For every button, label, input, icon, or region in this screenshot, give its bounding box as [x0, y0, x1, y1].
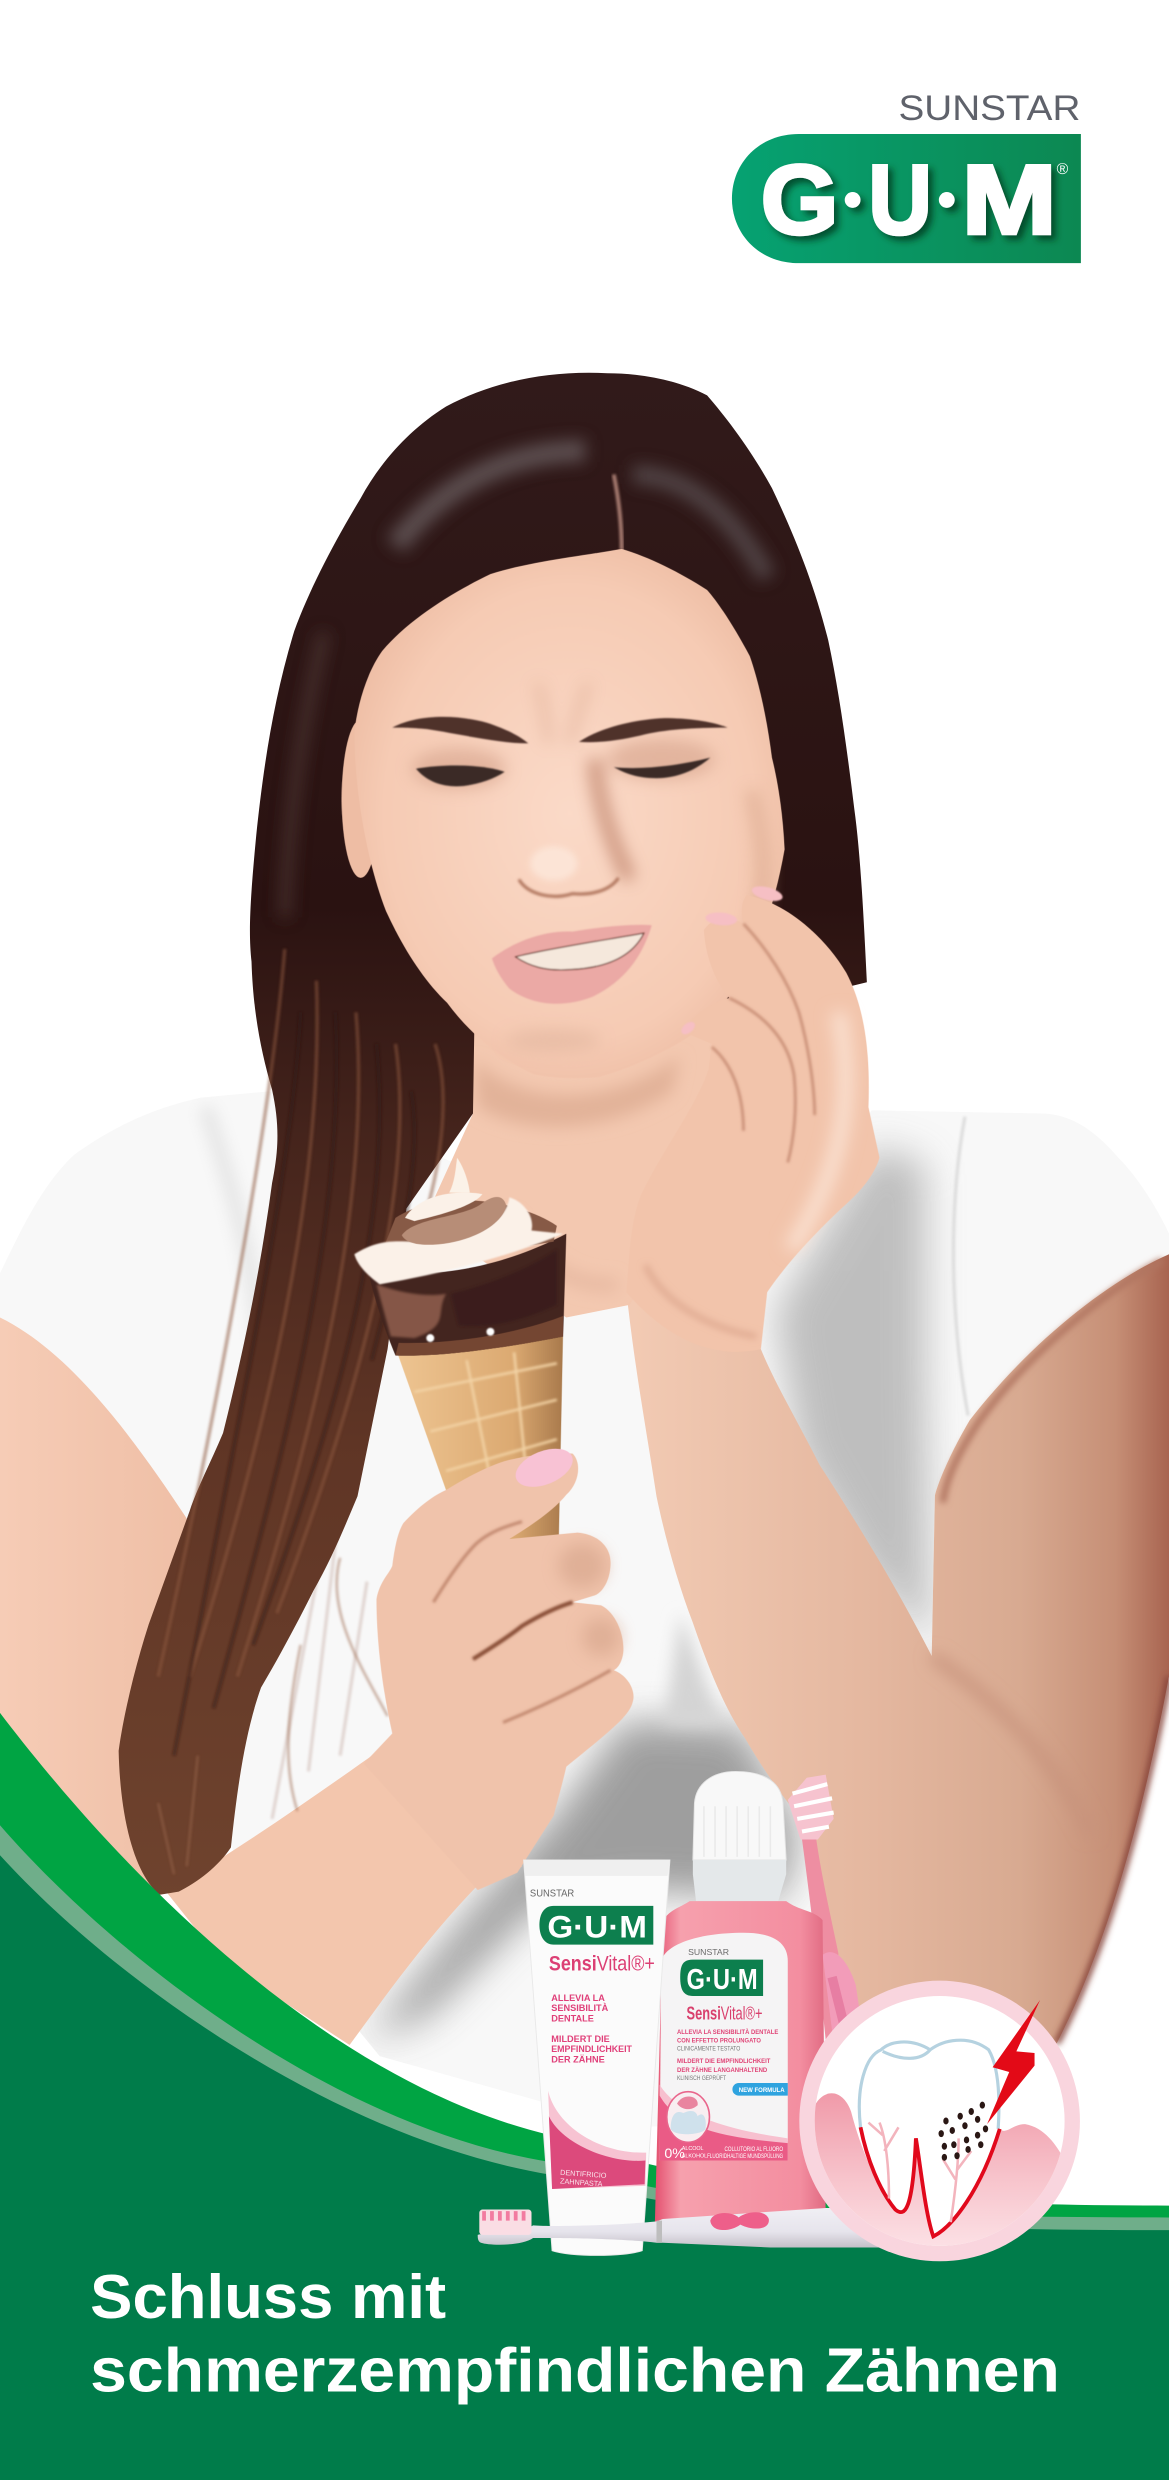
tube claims: ALLEVIA LA	[551, 1993, 605, 2003]
vanilla peak	[449, 1158, 470, 1193]
pulp branches	[868, 2123, 971, 2222]
right side shirt shadow	[775, 1147, 930, 1645]
brown swirl back	[380, 1200, 557, 1260]
bottle claims: CON EFFETTO PROLUNGATO	[677, 2038, 761, 2045]
thumbnail	[510, 1441, 578, 1494]
badge inner disc	[815, 1996, 1065, 2246]
hair highlights	[285, 451, 767, 917]
label footer: ALCOOL	[682, 2146, 704, 2152]
tube product type: DENTIFRICIO	[560, 2168, 607, 2180]
tube claims: MILDERT DIE	[551, 2034, 610, 2044]
bottle cap	[693, 1771, 786, 1860]
bottle product name: SensiVital®+	[687, 2004, 762, 2024]
headline: Schluss mit	[90, 2263, 446, 2332]
tube claims: SENSIBILITÀ	[551, 2002, 609, 2013]
tube product name: SensiVital®+	[549, 1952, 655, 1976]
left eye	[416, 765, 505, 786]
power button	[710, 2212, 769, 2230]
waffle cone	[395, 1329, 563, 1582]
white t-shirt	[190, 1097, 972, 2064]
right eye	[614, 758, 710, 778]
label footer	[664, 2146, 783, 2162]
label tooth circle	[667, 2092, 709, 2142]
sunstar wordmark: SUNSTAR	[899, 90, 1080, 128]
pale green stripe	[0, 1825, 1169, 2480]
label footer: FLUORIDHALTIGE MUNDSPÜLUNG	[707, 2153, 783, 2160]
lips	[492, 925, 652, 1004]
left forearm	[166, 1745, 522, 2045]
green wave band	[0, 1713, 1169, 2480]
tube product type	[560, 2168, 607, 2188]
label footer: 0%	[664, 2146, 685, 2162]
toothpaste tube	[524, 1860, 670, 2255]
exposed dentine dots	[939, 2102, 988, 2161]
ice cream cone	[354, 1158, 566, 1582]
bottle label	[660, 1933, 788, 2161]
right arm	[626, 1254, 1169, 2043]
vanilla swirl	[354, 1197, 563, 1284]
bottle gum logo: G·U·M	[687, 1964, 758, 1996]
red nerve line	[861, 2127, 1000, 2236]
gums	[814, 2093, 1060, 2246]
bottle claims: CLINICAMENTE TESTATO	[677, 2046, 740, 2053]
bottle neck	[693, 1860, 786, 1901]
hand holding ice cream	[364, 1441, 634, 1890]
label footer: ALKOHOL	[682, 2153, 707, 2159]
finger tips shade	[558, 1544, 620, 1656]
mouthwash bottle	[655, 1771, 826, 2222]
tube claims: DENTALE	[551, 2013, 594, 2023]
bottle claims: MILDERT DIE EMPFINDLICHKEIT	[677, 2058, 770, 2065]
left upper arm	[0, 1318, 187, 1895]
lightning bolt	[987, 2000, 1040, 2124]
tooth	[859, 2040, 998, 2236]
tube gum logo: G·U·M	[547, 1909, 647, 1944]
chocolate coating	[367, 1234, 566, 1356]
gum lettering: G	[761, 144, 838, 254]
bottle claims: KLINISCH GEPRÜFT	[677, 2074, 726, 2082]
neck and chest	[424, 1012, 720, 1318]
headline	[90, 2263, 1060, 2405]
tube crimp	[524, 1860, 670, 1876]
tube product type: ZAHNPASTA	[560, 2176, 603, 2188]
nose	[519, 846, 619, 896]
bottle claims	[677, 2027, 779, 2082]
new formula pill	[732, 2083, 788, 2096]
fingernails	[679, 883, 784, 1037]
face shape	[354, 549, 785, 1078]
headline: schmerzempfindlichen Zähnen	[90, 2336, 1060, 2405]
bristles	[479, 2210, 532, 2235]
label swoosh	[660, 2085, 788, 2161]
tube brand: SUNSTAR	[530, 1888, 575, 1899]
chocolate swirl centre	[402, 1197, 506, 1245]
tube pink swoosh	[548, 2091, 646, 2189]
woman portrait with ice cream	[0, 373, 1169, 2151]
gum lettering	[761, 144, 1057, 254]
tube claims	[551, 1993, 632, 2064]
product group	[478, 1771, 886, 2255]
brush handle	[478, 2208, 886, 2248]
badge outer ring	[799, 1981, 1080, 2261]
registered mark: ®	[1057, 161, 1069, 178]
teeth	[516, 933, 644, 970]
brush neck band	[656, 2221, 662, 2243]
face shading	[411, 683, 762, 1052]
ear	[342, 720, 380, 878]
bottle claims: ALLEVIA LA SENSIBILITÀ DENTALE	[677, 2027, 779, 2036]
bottle body	[655, 1901, 826, 2222]
gum green plate	[732, 134, 1081, 263]
logo: Sunstar GUM	[732, 90, 1081, 263]
tooth enamel outline	[859, 2040, 999, 2129]
gum lettering: M	[962, 144, 1057, 254]
tube claims: DER ZÄHNE	[551, 2054, 605, 2064]
gum lettering: U	[868, 144, 932, 254]
lying electric toothbrush	[478, 2208, 886, 2248]
raised hand touching cheek	[626, 883, 880, 1352]
bottle claims: DER ZÄHNE LANGANHALTEND	[677, 2066, 768, 2074]
badge: sensitive tooth	[799, 1981, 1080, 2261]
hair parting	[614, 474, 622, 550]
face	[342, 549, 785, 1078]
finger gaps	[433, 1522, 611, 1722]
label footer: COLLUTORIO AL FLUORO	[724, 2147, 783, 2153]
bright green curve	[0, 1713, 1169, 2480]
lower shirt shadow	[367, 1721, 799, 2040]
hair strands	[158, 949, 443, 1874]
new formula pill: NEW FORMULA	[739, 2087, 785, 2094]
eyebrows	[392, 717, 728, 743]
tube claims: EMPFINDLICHKEIT	[551, 2044, 632, 2054]
upright toothbrush	[788, 1775, 862, 2056]
long dark hair	[119, 373, 867, 1895]
label brand: SUNSTAR	[688, 1947, 729, 1957]
dark green area	[0, 1855, 1169, 2480]
